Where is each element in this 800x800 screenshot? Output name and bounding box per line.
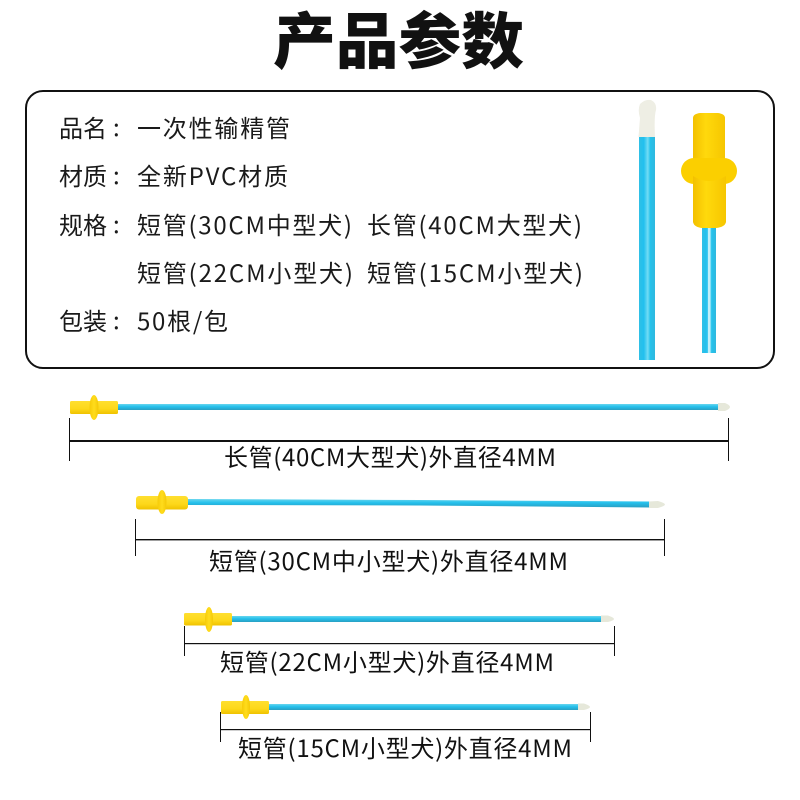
panel: product parameters bbox=[26, 91, 774, 368]
label: 22cm: 短管(22CM小型犬)外直径4MM bbox=[220, 643, 554, 678]
text: material: 材质 bbox=[59, 157, 107, 192]
dimension bracket: 30cm bbox=[135, 519, 665, 556]
text: specifications row 2: 短管(15CM小型犬) bbox=[367, 254, 583, 289]
tube: 15cm bbox=[221, 695, 590, 719]
image: connector close-up bbox=[681, 113, 737, 353]
text: material: 全新PVC材质 bbox=[137, 157, 288, 192]
tube: 30cm bbox=[136, 490, 665, 514]
text: product name: 一次性输精管 bbox=[137, 109, 290, 144]
text: specifications row 1: : bbox=[113, 205, 120, 240]
label: 15cm: 短管(15CM小型犬)外直径4MM bbox=[238, 729, 572, 764]
label: 40cm: 长管(40CM大型犬)外直径4MM bbox=[224, 438, 556, 473]
dimension bracket: 22cm bbox=[184, 626, 615, 656]
dimension bracket: 40cm bbox=[69, 418, 729, 461]
text: product name bbox=[59, 108, 290, 144]
text: specifications row 2 bbox=[137, 254, 583, 289]
label: 30cm: 短管(30CM中小型犬)外直径4MM bbox=[209, 542, 568, 577]
text: specifications row 1: 短管(30CM中型犬) bbox=[137, 206, 352, 241]
tube: 40cm long bbox=[70, 395, 730, 420]
text: product name: 品名 bbox=[59, 109, 107, 144]
text: specifications row 1: 规格 bbox=[59, 206, 107, 241]
text: packaging: : bbox=[113, 301, 120, 336]
text: specifications row 1 bbox=[59, 205, 582, 241]
text: packaging: 50根/包 bbox=[137, 302, 228, 337]
tube: 22cm bbox=[184, 607, 614, 632]
dimension bracket: 15cm bbox=[220, 712, 591, 742]
text: material bbox=[59, 156, 288, 192]
image: tube tip close-up bbox=[638, 100, 656, 360]
text: specifications row 1: 长管(40CM大型犬) bbox=[367, 206, 582, 241]
text: material: : bbox=[113, 156, 120, 191]
text: product name: : bbox=[113, 108, 120, 143]
text: packaging: 包装 bbox=[59, 302, 107, 337]
text: specifications row 2: 短管(22CM小型犬) bbox=[137, 254, 353, 289]
text: packaging bbox=[59, 301, 228, 337]
